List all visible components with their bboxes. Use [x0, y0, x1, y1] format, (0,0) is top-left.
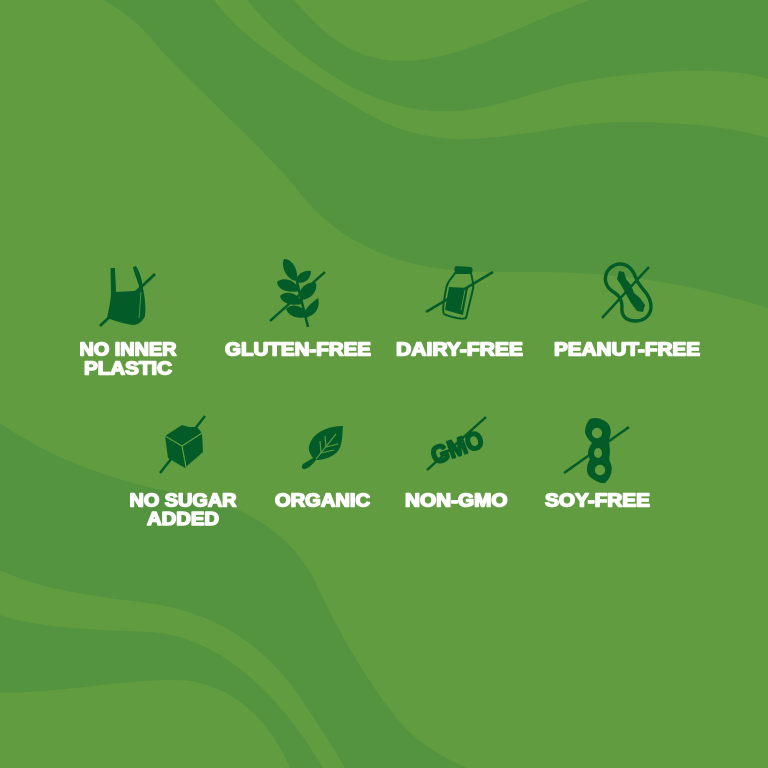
label: no sugar added	[130, 490, 236, 529]
icon: no sugar cube	[160, 416, 205, 473]
label: no sugar added: NO SUGAR	[130, 490, 236, 510]
icon: peanut-free	[602, 264, 651, 321]
label: no sugar added: ADDED	[147, 509, 219, 529]
icon: dairy-free bottle	[426, 266, 493, 319]
label: organic: ORGANIC	[275, 490, 370, 510]
label: soy-free: SOY-FREE	[545, 490, 650, 510]
label: non-gmo: NON-GMO	[405, 490, 508, 510]
icon: organic leaf	[302, 426, 343, 469]
icon: gluten-free wheat	[270, 259, 325, 327]
label: no inner plastic	[80, 339, 176, 378]
icon: non-GMO: GMO	[427, 426, 488, 470]
icon: no inner plastic bag	[100, 266, 155, 326]
label: dairy-free: DAIRY-FREE	[396, 339, 523, 359]
label: no inner plastic: PLASTIC	[84, 358, 172, 378]
label: gluten-free: GLUTEN-FREE	[225, 339, 371, 359]
icon: soy-free pod	[564, 418, 629, 483]
label: no inner plastic: NO INNER	[80, 339, 176, 359]
label: peanut-free: PEANUT-FREE	[554, 339, 700, 359]
